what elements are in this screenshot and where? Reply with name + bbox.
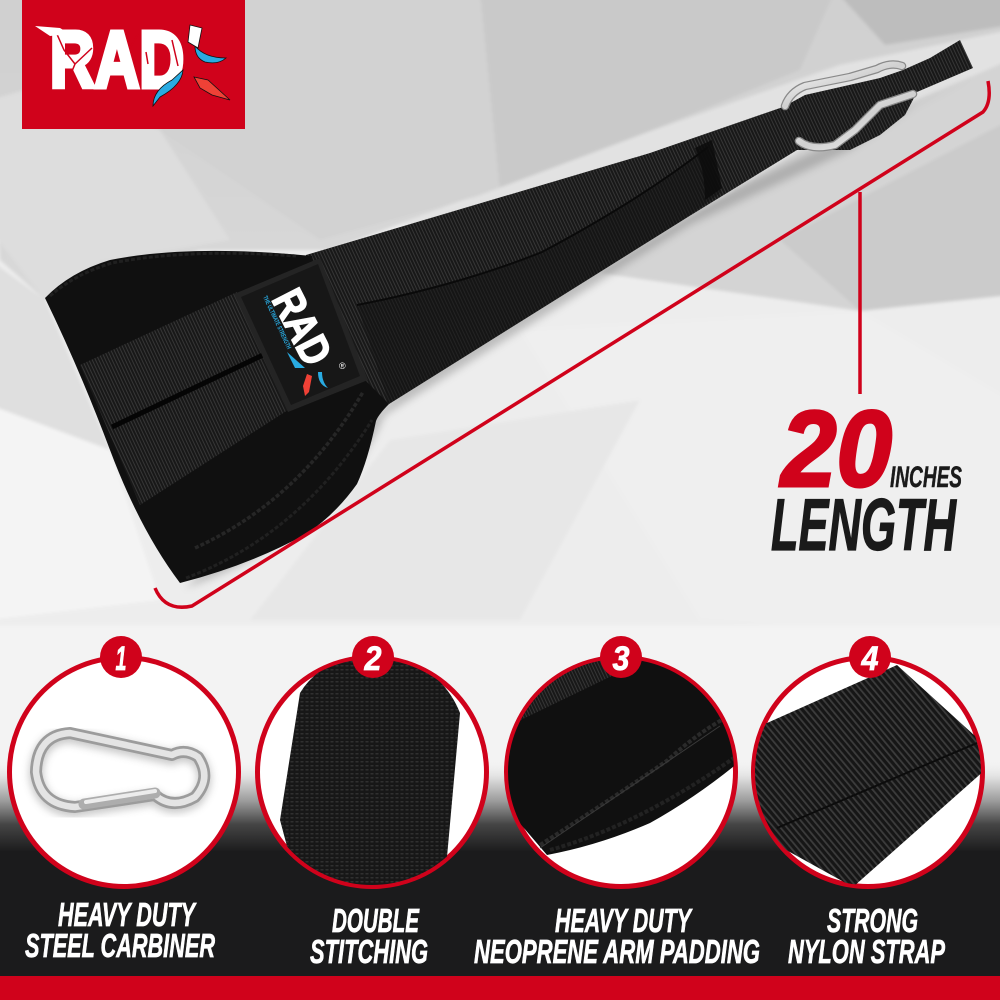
webbing photo <box>280 660 460 895</box>
caption 1 <box>25 896 215 964</box>
label limbs <box>287 352 328 396</box>
strap fold line <box>357 147 708 305</box>
label tagline: THE ULTIMATE STRENGTH <box>261 295 292 351</box>
length callout <box>771 388 962 566</box>
panel 2: stitching <box>258 636 486 895</box>
buckle fold wedge <box>695 140 722 200</box>
panel 3: neoprene <box>500 636 745 886</box>
caption 4 <box>788 902 946 970</box>
strap lower fold <box>357 147 720 404</box>
neoprene arm pad <box>45 251 389 583</box>
caption 2: STITCHING <box>310 933 428 970</box>
logo top spur <box>35 26 70 36</box>
badge 1: 1 <box>116 640 126 678</box>
product: arm strap <box>45 40 975 588</box>
logo limbs <box>153 25 230 106</box>
carabiner photo <box>36 733 204 810</box>
logo panel <box>22 0 245 129</box>
pad lower seam <box>195 392 363 548</box>
caption 3: NEOPRENE ARM PADDING <box>474 933 760 970</box>
label wordmark: RAD <box>262 281 341 373</box>
registered mark: ® <box>339 361 346 371</box>
bracket stem <box>858 192 862 394</box>
badge 2 <box>352 636 394 678</box>
panel 4: nylon <box>750 636 985 887</box>
carabiner on strap <box>785 65 913 147</box>
bottom red band <box>0 976 1000 1000</box>
badge 1 <box>100 636 142 678</box>
woven label <box>234 258 368 412</box>
length bracket <box>155 81 989 607</box>
panel 1: carabiner <box>10 636 238 886</box>
pad slot <box>112 355 263 427</box>
nylon photo <box>750 665 985 887</box>
badge 4: 4 <box>861 640 879 678</box>
badge 2: 2 <box>364 640 382 678</box>
pad flap seam <box>186 420 372 578</box>
dark footer gradient <box>0 760 1000 852</box>
caption 2 <box>310 902 428 970</box>
caption 2: DOUBLE <box>332 902 420 939</box>
caption 1: STEEL CARBINER <box>25 927 215 964</box>
caption 4: STRONG <box>827 902 918 939</box>
badge 3 <box>600 636 642 678</box>
caption 3 <box>474 902 760 970</box>
caption 3: HEAVY DUTY <box>555 902 693 939</box>
number: 20 <box>779 388 892 509</box>
pad band <box>80 292 288 505</box>
logo cracks <box>42 28 178 76</box>
pad top stitching <box>50 253 296 296</box>
logo wordmark: RAD <box>50 15 184 104</box>
badge 3: 3 <box>612 640 630 678</box>
badge 4 <box>849 636 891 678</box>
strap shadow <box>185 75 975 588</box>
caption 1: HEAVY DUTY <box>58 896 197 933</box>
strap webbing <box>300 40 973 404</box>
neoprene photo <box>508 660 734 855</box>
unit: INCHES <box>890 461 962 494</box>
